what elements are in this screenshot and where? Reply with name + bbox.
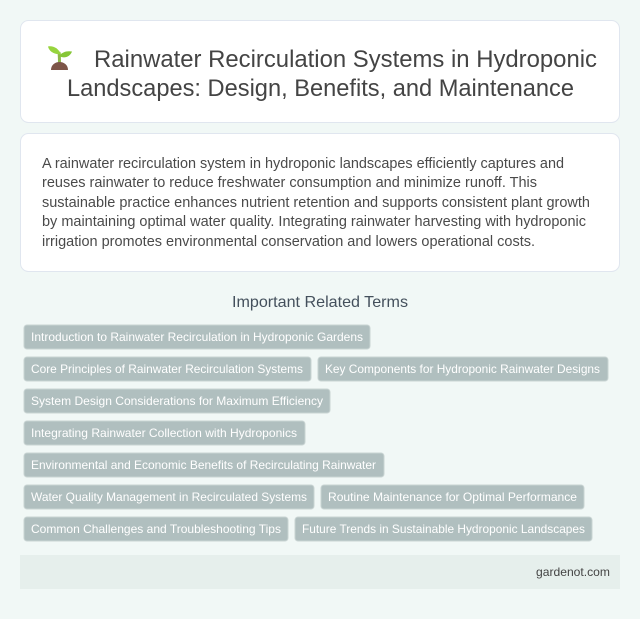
tag — [24, 389, 330, 413]
tag: Integrating Rainwater Collection with Hydroponics — [31, 426, 297, 440]
summary text: reuses rainwater to reduce freshwater consumption and minimize runoff. This — [42, 175, 537, 191]
title: Rainwater Recirculation Systems in Hydroponic — [94, 46, 597, 73]
footer — [20, 555, 620, 589]
title: Landscapes: Design, Benefits, and Maintenance — [67, 75, 574, 102]
tag — [318, 357, 608, 381]
tag — [24, 517, 288, 541]
tag: Water Quality Management in Recirculated Systems — [31, 490, 307, 504]
tag — [321, 485, 584, 509]
tag — [24, 325, 370, 349]
tag: Environmental and Economic Benefits of Recirculating Rainwater — [31, 458, 376, 472]
tag: Introduction to Rainwater Recirculation in Hydroponic Gardens — [31, 330, 363, 344]
summary text: irrigation promotes environmental conservation and lowers operational costs. — [42, 234, 535, 250]
tag — [24, 453, 384, 477]
tag: Key Components for Hydroponic Rainwater Designs — [325, 362, 600, 376]
heading: related terms: Important Related Terms — [232, 294, 408, 311]
tag: Core Principles of Rainwater Recirculation Systems — [31, 362, 303, 376]
tag — [24, 357, 311, 381]
tag — [24, 421, 305, 445]
tag: System Design Considerations for Maximum Efficiency — [31, 394, 323, 408]
summary text: by maintaining optimal water quality. Integrating rainwater harvesting with hydroponic — [42, 214, 586, 230]
tag — [24, 485, 314, 509]
icon: seedling — [48, 46, 72, 70]
tag: Future Trends in Sustainable Hydroponic Landscapes — [302, 522, 585, 536]
tag: Routine Maintenance for Optimal Performance — [328, 490, 577, 504]
tag — [295, 517, 592, 541]
title — [67, 46, 597, 102]
tag list — [24, 325, 608, 541]
tag: Common Challenges and Troubleshooting Tips — [31, 522, 281, 536]
summary text — [42, 156, 590, 250]
panel: summary — [20, 134, 620, 272]
summary text: sustainable practice enhances nutrient retention and supports consistent plant growth — [42, 195, 590, 211]
panel: title card — [20, 20, 620, 122]
footer source: gardenot.com — [536, 565, 610, 579]
summary text: A rainwater recirculation system in hydroponic landscapes efficiently captures and — [42, 156, 564, 172]
